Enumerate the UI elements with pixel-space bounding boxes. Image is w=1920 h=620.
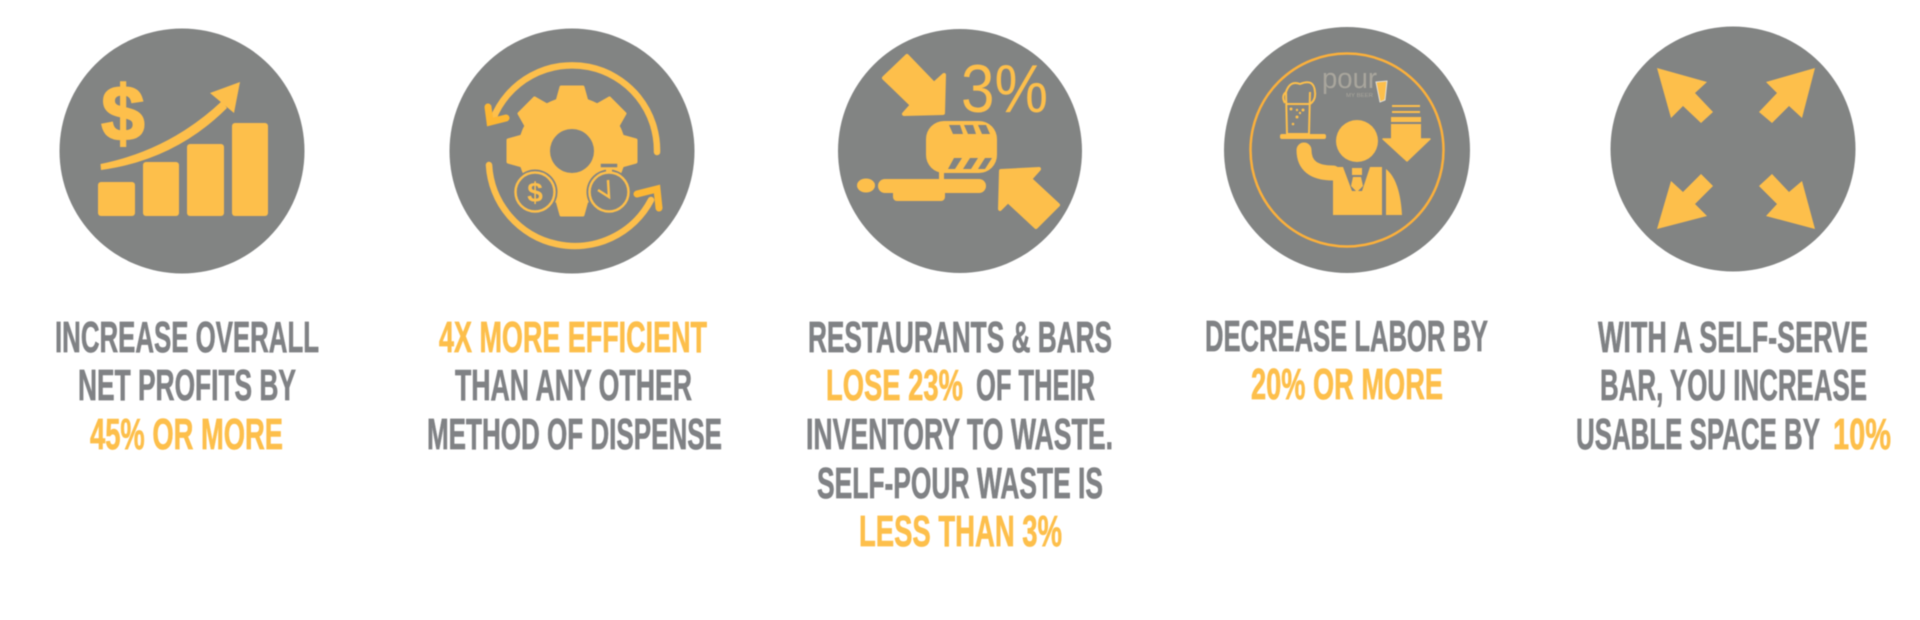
icon: waiter with beer: [1224, 27, 1470, 273]
panel: net profits: [55, 28, 319, 459]
panel: labor: [1205, 27, 1488, 409]
text: restaurants and bars waste: RESTAURANTS & BARS: [808, 313, 1112, 362]
icon: spilled barrel with 3 percent: 3%: [961, 51, 1048, 127]
icon: waiter with beer: pour: [1322, 63, 1377, 95]
text: decrease labor: 20% OR MORE: [1251, 360, 1443, 409]
icon: gear with cycle arrows: [450, 28, 694, 274]
text: decrease labor: [1205, 312, 1488, 409]
text: restaurants and bars waste: LESS THAN 3%: [859, 507, 1062, 556]
text: increase overall net profits: INCREASE OVERALL: [55, 313, 319, 362]
text: self-serve bar usable space: 10%: [1833, 410, 1891, 459]
text: self-serve bar usable space: [1576, 313, 1891, 459]
text: restaurants and bars waste: [806, 313, 1113, 556]
text: 4x more efficient: METHOD OF DISPENSE: [427, 410, 722, 459]
text: decrease labor: DECREASE LABOR BY: [1205, 312, 1488, 361]
text: increase overall net profits: NET PROFITS BY: [78, 361, 296, 410]
icon: waiter with beer: MY BEER: [1346, 93, 1373, 99]
icon: four expanding arrows: [1610, 26, 1856, 272]
text: 4x more efficient: 4X MORE EFFICIENT: [439, 313, 707, 362]
icon: profit bar chart: [60, 28, 304, 274]
text: restaurants and bars waste: LOSE 23%: [826, 361, 963, 410]
text: restaurants and bars waste: INVENTORY TO WASTE.: [806, 410, 1113, 459]
panel: waste: [806, 29, 1113, 556]
text: 4x more efficient: [427, 313, 722, 459]
text: restaurants and bars waste: OF THEIR: [976, 361, 1095, 410]
icon: gear with cycle arrows: $: [527, 177, 543, 208]
icon: profit bar chart: $: [101, 69, 145, 157]
icon: spilled barrel with 3 percent: [838, 29, 1082, 273]
panel: efficiency: [427, 28, 722, 459]
text: 4x more efficient: THAN ANY OTHER: [455, 361, 692, 410]
panel: usable space: [1576, 26, 1891, 459]
text: increase overall net profits: 45% OR MORE: [90, 410, 283, 459]
text: increase overall net profits: [55, 313, 319, 459]
text: restaurants and bars waste: SELF-POUR WASTE IS: [817, 459, 1103, 508]
